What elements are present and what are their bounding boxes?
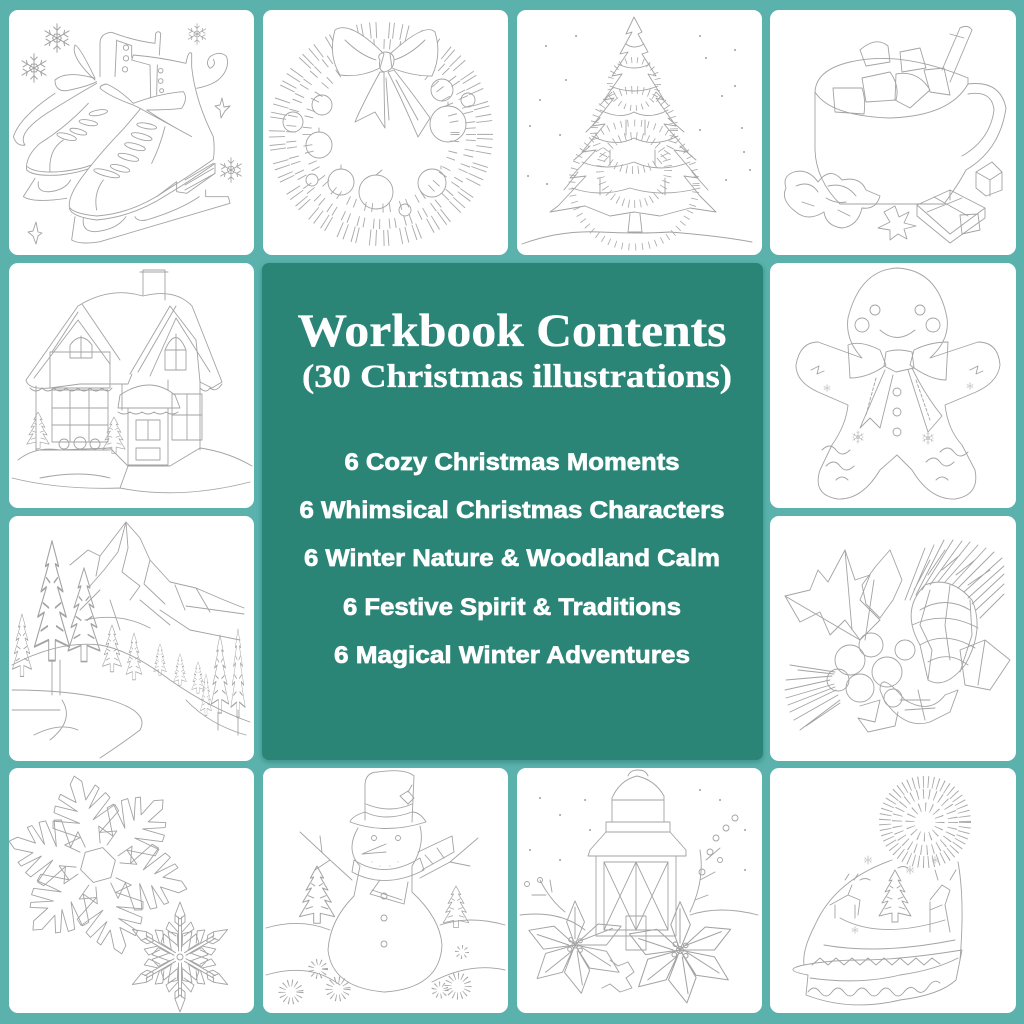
category list: 6 Whimsical Christmas Characters — [300, 497, 724, 524]
panel: ice skates — [9, 10, 254, 255]
panel: snow-covered cottage — [9, 263, 254, 508]
panel: mountain landscape — [9, 516, 254, 761]
panel: holly and pine cone — [770, 516, 1016, 761]
panel: gingerbread man — [770, 263, 1016, 508]
heading: workbook contents: Workbook Contents — [298, 305, 726, 357]
category list: 6 Winter Nature & Woodland Calm — [304, 545, 720, 572]
panel: workbook contents — [262, 263, 763, 760]
small snowflake — [123, 902, 237, 1012]
large snowflake — [0, 751, 215, 979]
panel: snowman — [263, 768, 508, 1013]
panel: snowy pine tree — [517, 10, 762, 255]
panel: hot cocoa mug — [770, 10, 1016, 255]
panel: knit beanie — [770, 768, 1016, 1013]
category list — [300, 449, 724, 669]
panel: snowflakes — [0, 751, 254, 1013]
panel: christmas wreath — [263, 10, 508, 255]
category list: 6 Magical Winter Adventures — [334, 642, 690, 669]
category list: 6 Festive Spirit & Traditions — [343, 594, 681, 621]
panel: lantern and poinsettias — [517, 768, 762, 1013]
category list: 6 Cozy Christmas Moments — [344, 449, 680, 476]
subheading: 30 illustrations: (30 Christmas illustrations) — [302, 359, 732, 395]
